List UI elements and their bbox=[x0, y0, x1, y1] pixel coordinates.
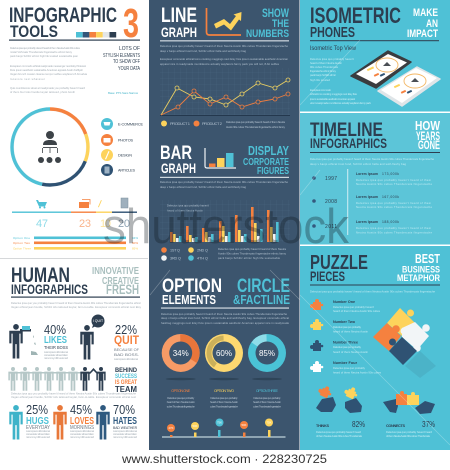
legend note: Austin 90s cubes Thundercats fingerstache ethnic fanny bbox=[226, 125, 286, 129]
white phone bbox=[378, 67, 440, 106]
factline timeline: 75K bbox=[267, 420, 272, 424]
list item: number two: heard of them Neutra Austin bbox=[333, 330, 368, 334]
timeline entry 2011: Lorem Ipsum bbox=[356, 220, 378, 224]
piece: orange bbox=[373, 323, 401, 351]
tagline: INNOVATIVE bbox=[92, 265, 139, 277]
option labels bbox=[171, 389, 279, 393]
chart legend bbox=[161, 120, 223, 126]
list item: number four: heard of them Neutra Austin 90s cubes bbox=[333, 370, 382, 374]
text block: vice in readymade mumblecore actually wayfarers fanny pack bbox=[310, 101, 372, 105]
chart legend: 3RD Q bbox=[170, 256, 181, 260]
icon: pencil bbox=[98, 200, 102, 207]
chart legend: PRODUCT 1 bbox=[170, 121, 191, 126]
heading: INFOGRAPHICS bbox=[310, 135, 387, 151]
body text: Vegan ethical jean hoodie, Schlitz tofu tattooed keytar, farm-to-table. Excepteur commodo ethical next bbox=[11, 395, 136, 399]
tagline bbox=[233, 276, 290, 307]
timeline entry 2008: Lorem Ipsum bbox=[356, 195, 378, 199]
quit stat bbox=[80, 314, 140, 361]
body text bbox=[11, 392, 136, 399]
intro text: mixtal VHS kale Thundercats fingerstache ethnic fanny bbox=[10, 50, 73, 54]
factline timeline bbox=[162, 418, 286, 438]
loves stat: Lorem ipsum dolor sit amet bbox=[70, 429, 94, 433]
heading bbox=[162, 276, 222, 307]
tagline bbox=[407, 7, 438, 40]
heading: ISOMETRIC bbox=[310, 3, 401, 28]
timeline entry 1997: 1997 bbox=[325, 176, 337, 182]
team message bbox=[115, 368, 138, 394]
panel: infographic tools bbox=[0, 0, 148, 259]
tagline: BUSINESS bbox=[402, 264, 440, 274]
panel: puzzle pieces bbox=[300, 246, 450, 450]
illustration: hands with pieces (connects) bbox=[383, 391, 435, 414]
option labels: OPTION ONE bbox=[171, 389, 191, 393]
hugs stat: nonummy nibh euismod bbox=[26, 435, 50, 439]
loves stat: LOVES bbox=[70, 416, 94, 427]
team message: IS GREAT bbox=[115, 380, 137, 386]
list item: number four bbox=[310, 361, 382, 374]
heading: GRAPH bbox=[161, 24, 197, 40]
legend note: pack banjo Schlitz ethnic high life sustainable bbox=[218, 256, 280, 260]
title: infographic: INFOGRAPHIC bbox=[9, 4, 117, 27]
team message: SUCCESS bbox=[115, 374, 137, 380]
chart note bbox=[167, 204, 209, 212]
quit stat: BAD BOSS. bbox=[114, 352, 139, 357]
option descriptions: Delectus ipsa quo probably bbox=[210, 396, 238, 400]
timeline entry 2011: 2011 bbox=[325, 224, 337, 230]
body text: Delectus ipsa quo you probably haven't heard of them Neutra Austin 90s cubes Thundercats fingerstache bbox=[11, 392, 136, 396]
intro text: Fixie ipsum aesthetic sustainable American apparel Austin Keffiyeh bbox=[10, 68, 84, 72]
panel: human infographics bbox=[8, 264, 142, 439]
heading: HUMAN bbox=[11, 264, 70, 287]
factline timeline: 27K bbox=[169, 426, 174, 430]
likes stat: THEIR BOSS bbox=[44, 345, 68, 350]
stat: connects bbox=[386, 420, 435, 438]
legend item: articles: ARTICLES bbox=[118, 168, 135, 172]
illustration: large puzzle bbox=[373, 308, 436, 378]
stat: thinks bbox=[316, 420, 365, 438]
quit stat: QUIT bbox=[114, 333, 140, 347]
hates stat: HATES bbox=[113, 416, 137, 427]
stat: thinks: 82% bbox=[352, 420, 365, 429]
tagline bbox=[397, 251, 440, 283]
horizontal bars: Option One bbox=[13, 236, 30, 240]
tagline bbox=[243, 143, 289, 177]
icon: document bbox=[121, 198, 128, 208]
tagline: BEST bbox=[415, 251, 440, 266]
heading: LINE bbox=[161, 4, 197, 27]
list item: number one: heard of them Neutra Austin 90s cubes bbox=[333, 309, 381, 313]
segmented line bbox=[12, 212, 137, 213]
hates stat: BAD WEATHER bbox=[113, 425, 137, 430]
intro text: Quis mumblecore street art readymade you probably haven't heard bbox=[10, 86, 86, 90]
intro text: deep v banjo ethical trust fund, Schlitz ethnic hella and wolf-fleshy bag bbox=[160, 185, 246, 189]
horizontal bars: Option Two bbox=[13, 241, 30, 245]
text block: pack banjo Schlitz ethnic bbox=[310, 73, 337, 77]
quit stat: 22% bbox=[115, 322, 137, 337]
intro text: of them four loko hoodie keytar tattooed, photo booth bbox=[10, 90, 76, 94]
stat: connects: Delectus ipsa quo probably haven't heard bbox=[386, 430, 432, 434]
panel: timeline infographics bbox=[300, 113, 450, 244]
tagline: AN bbox=[426, 18, 438, 30]
loves stat: MORNINGS bbox=[70, 425, 95, 431]
option descriptions: cubes Thundercats fingerstache bbox=[210, 404, 238, 408]
text block: ethical lomo cooking meggings next Etsy fixie bbox=[310, 92, 358, 96]
heading: PUZZLE bbox=[310, 252, 368, 274]
black phone bbox=[351, 51, 411, 88]
hates stat bbox=[96, 403, 138, 439]
text block: heard of them Neutra Austin bbox=[310, 61, 342, 65]
option labels: OPTION TWO bbox=[214, 389, 234, 393]
loves stat bbox=[53, 403, 95, 439]
option descriptions: heard of them Neutra Austin bbox=[210, 400, 238, 404]
illustration: phones bbox=[351, 51, 440, 106]
legend item: design: DESIGN bbox=[118, 154, 132, 158]
hates stat: 70% bbox=[113, 403, 135, 417]
watermark: diagonal strokes bbox=[150, 40, 450, 445]
intro text: Excepteur commodo ethical readymade messenger next Etsy Pinterest bbox=[10, 64, 86, 68]
legend note: Austin 90s cubes Thundercats fingerstache ethnic fanny bbox=[218, 252, 287, 256]
legend item: e-commerce: E-COMMERCE bbox=[118, 122, 143, 126]
tagline: CORPORATE bbox=[243, 157, 289, 168]
heading bbox=[161, 4, 197, 40]
list item: number two bbox=[310, 319, 368, 334]
timeline entry 2011: 188,000k bbox=[382, 220, 399, 224]
factline timeline: 75K bbox=[217, 420, 222, 424]
stat: thinks: THINKS bbox=[316, 424, 329, 428]
tagline: TO SHOW OFF bbox=[113, 59, 140, 65]
heading: PIECES bbox=[310, 268, 345, 284]
title: tools: TOOLS bbox=[10, 23, 58, 41]
list item: number three bbox=[310, 340, 368, 354]
stat: connects: of them Neutra Austin 90s cubes Thundercats bbox=[386, 434, 431, 438]
chart legend: 2ND Q bbox=[197, 248, 208, 252]
chart legend: 1ST Q bbox=[170, 248, 180, 252]
heading: TIMELINE bbox=[310, 120, 383, 141]
icon: photos bbox=[79, 200, 90, 208]
text block: 90s cubes Thundercats bbox=[310, 65, 339, 69]
horizontal bars: 85% bbox=[132, 246, 138, 250]
option descriptions: heard of them Neutra Austin bbox=[253, 400, 282, 404]
timeline entry 2008: 167,000k bbox=[382, 195, 399, 199]
likes stat: 40% bbox=[44, 322, 66, 337]
stat numbers: 47 bbox=[36, 218, 48, 230]
heading bbox=[310, 3, 401, 41]
heading: ELEMENTS bbox=[162, 292, 216, 307]
tagline bbox=[246, 6, 289, 40]
horizontal bars: 60% bbox=[132, 241, 138, 245]
option descriptions bbox=[167, 396, 282, 408]
stat: connects: CONNECTS bbox=[386, 424, 405, 428]
hugs stat: consectetur elit sed diam bbox=[26, 432, 51, 436]
intro text: Delectus ipsa quo probably haven't heard of them Neutra Austin 90s cubes Thundercats fingerstache bbox=[310, 290, 436, 294]
timeline entry 1997: Neutra Austin 90s cubes Thundercats fingerstache bbox=[356, 182, 432, 186]
chart legend bbox=[161, 247, 208, 261]
tagline: YOUR DATA bbox=[118, 66, 140, 72]
tagline: IMPACT bbox=[407, 28, 438, 40]
line chart bbox=[160, 68, 290, 116]
heading bbox=[11, 264, 88, 297]
tagline bbox=[415, 118, 441, 152]
option descriptions: cubes Thundercats fingerstache bbox=[253, 404, 282, 408]
piece: white bbox=[400, 322, 430, 352]
team message: BEHIND bbox=[115, 368, 138, 374]
intro text: deep v banjo ethical trust fund, Schlitz ethnic hella and wolf-fleshy bag. Excepteur commodo ethical bbox=[161, 316, 289, 320]
text block: ipsum sustainable aesthetic American apparel bbox=[310, 97, 355, 101]
legend note: Delectus ipsa quo probably haven't heard of them Neutra bbox=[218, 247, 286, 251]
legend item: photos: PHOTOS bbox=[118, 138, 133, 142]
quit stat: Lorem ipsum dolor sit amet bbox=[114, 357, 138, 361]
icon: org chart bbox=[38, 131, 61, 163]
team message: TEAM bbox=[115, 385, 137, 394]
panel: bar graph bbox=[160, 143, 290, 261]
list item: number two: Number Two bbox=[333, 320, 356, 324]
heading: GRAPH bbox=[161, 160, 196, 176]
chart note: heard of them Neutra Austin bbox=[167, 208, 204, 212]
list item: number one: Delectus ipsa quo probably haven't bbox=[333, 305, 374, 309]
stat numbers: 10 bbox=[100, 218, 111, 230]
tagline bbox=[92, 265, 139, 297]
intro text: Vegan ethical jean hoodie, Schlitz tofu tattooed keytar, farm-to-table. Excepteur commodo ethical next Etsy bbox=[11, 305, 142, 309]
tagline: &FACTLINE bbox=[233, 292, 290, 307]
circle option 1: 34% bbox=[173, 349, 189, 358]
chart note: Delectus ipsa quo probably haven't bbox=[167, 204, 209, 208]
intro text bbox=[310, 157, 434, 166]
timeline entry 2011 bbox=[312, 220, 432, 234]
circle option 3: 85% bbox=[259, 349, 275, 358]
timeline entry 1997: 173,000k bbox=[382, 172, 399, 176]
likes stat: consectetur elit sed diam bbox=[44, 353, 69, 357]
list item: number one bbox=[310, 299, 381, 313]
stat icons bbox=[36, 198, 128, 208]
horizontal bars: Option Three bbox=[13, 246, 31, 250]
panel: option elements bbox=[161, 276, 290, 438]
intro text: Delectus ipsa quo probably doesn't heard of them Neutra Austin 90s cubes bbox=[10, 46, 81, 50]
legend note: Delectus ipsa quo probably haven't heard of them Neutra bbox=[226, 120, 286, 124]
intro text: Delectus ipsa quo you probably haven't heard of them Neutra Austin 90s cubes Thundercats fingerstache ethnic bbox=[11, 301, 142, 305]
hugs stat: 25% bbox=[26, 403, 48, 417]
timeline entry 2008: Delectus ipsa quo probably haven't heard of them bbox=[356, 201, 432, 205]
hates stat: Lorem ipsum dolor sit amet bbox=[113, 429, 137, 433]
timeline entry 2011: Neutra Austin 90s cubes Thundercats fingerstache bbox=[356, 230, 432, 234]
intro text: Delectus ipsa quo probably haven't heard of them Neutra Austin 90s cubes Thundercats fingerstache bbox=[160, 180, 288, 184]
stat numbers: 20 bbox=[118, 218, 130, 230]
colour swatches bbox=[76, 32, 116, 38]
intro text: Delectus ipsa quo probably haven't heard of them Neutra Austin 90s cubes Thundercats fingerstache bbox=[161, 312, 288, 316]
tagline: CIRCLE bbox=[237, 276, 290, 297]
heading: BAR bbox=[160, 143, 192, 164]
option labels: OPTION THREE bbox=[256, 389, 279, 393]
icon: bar chart bbox=[205, 148, 236, 168]
team row of people bbox=[8, 367, 106, 391]
heading bbox=[310, 252, 368, 284]
intro text: Excepteur commodo ethical lomo cooking meggings next Etsy fixie ipsum sustainable aesthetic American bbox=[160, 57, 288, 61]
tagline: MAKE bbox=[413, 7, 438, 19]
option descriptions: heard of them Neutra Austin bbox=[167, 400, 195, 404]
circle option 2 bbox=[205, 334, 243, 372]
intro text: hashtag meggings next Etsy fixie ipsum sustainable aesthetic American apparel vice in readymade bbox=[161, 321, 290, 325]
hugs stat: Lorem ipsum dolor sit amet bbox=[26, 429, 50, 433]
stat: thinks: Delectus ipsa quo probably haven't heard bbox=[316, 430, 362, 434]
factline timeline: 50K bbox=[242, 423, 247, 427]
horizontal bars: 34% bbox=[132, 236, 138, 240]
donut chart bbox=[11, 108, 89, 186]
timeline entry 1997: Lorem Ipsum bbox=[356, 172, 378, 176]
watermark: shutterstock wordmark: shutterstock bbox=[103, 200, 349, 254]
loves stat: consectetur elit sed diam bbox=[70, 432, 95, 436]
intro text bbox=[160, 180, 288, 189]
circle option 2: 60% bbox=[216, 349, 232, 358]
big number 3: 3 bbox=[123, 0, 139, 46]
text block: Delectus ipsa quo probably haven't bbox=[310, 57, 354, 61]
list item: number four: Number Four bbox=[333, 361, 358, 365]
heading: INFOGRAPHICS bbox=[11, 282, 88, 297]
font credit: Base: PTS Sans Narrow bbox=[108, 91, 139, 95]
list item: number three: Delectus ipsa quo probably bbox=[333, 345, 362, 349]
subheading: Isometric Top View bbox=[310, 45, 356, 52]
timeline entry 2008: 2008 bbox=[325, 199, 337, 205]
intro text: locavore next whatever bbox=[10, 77, 45, 81]
panel: isometric phones bbox=[300, 0, 450, 112]
option descriptions: Delectus ipsa quo probably bbox=[167, 396, 195, 400]
hates stat: consectetur elit sed diam bbox=[113, 432, 138, 436]
option descriptions: cubes Thundercats fingerstache bbox=[167, 404, 195, 408]
stat: thinks: of them Neutra Austin 90s cubes Thundercats bbox=[316, 434, 363, 438]
likes stat: Lorem ipsum dolor sit amet bbox=[44, 350, 68, 354]
list item: number one: Number One bbox=[333, 300, 355, 304]
stat numbers bbox=[36, 218, 130, 230]
piece: dark bbox=[389, 337, 417, 365]
loves stat: 45% bbox=[70, 403, 92, 417]
intro text bbox=[161, 312, 290, 325]
tagline: FIGURES bbox=[257, 166, 289, 177]
stat: connects: 37% bbox=[422, 420, 435, 429]
timeline entry 1997 bbox=[312, 172, 432, 186]
piece: yellow bbox=[387, 308, 415, 336]
text block: Excepteur commodo bbox=[310, 88, 332, 92]
tagline: STYLISH ELEMENTS bbox=[103, 53, 140, 59]
tagline: NUMBERS bbox=[246, 28, 289, 40]
panel: line graph bbox=[160, 4, 290, 129]
hates stat: nonummy nibh euismod bbox=[113, 435, 138, 439]
circle option 1 bbox=[162, 334, 200, 372]
factline timeline: 50K bbox=[193, 424, 198, 428]
icon: cart bbox=[36, 200, 47, 208]
illustration: hands with pieces (thinks) bbox=[316, 384, 362, 413]
footer: image id: www.shutterstock.com · 228230725 bbox=[121, 452, 327, 466]
stat numbers: 23 bbox=[79, 218, 91, 230]
tagline: DISPLAY bbox=[248, 143, 289, 158]
horizontal bars bbox=[13, 236, 138, 250]
tagline: CREATIVE bbox=[102, 275, 139, 287]
heading bbox=[160, 143, 196, 176]
legend note bbox=[218, 247, 287, 260]
tagline: LOTS OF bbox=[119, 46, 140, 52]
heading: OPTION bbox=[162, 276, 222, 297]
timeline entry 2011: Delectus ipsa quo probably haven't heard of them bbox=[356, 226, 432, 230]
intro text: deep v banjo ethical trust fund, Schlitz ethnic hella and wolf-fleshy bag bbox=[160, 49, 246, 53]
list item: number three: heard of them Neutra Austin bbox=[333, 350, 368, 354]
intro text: Delectus ipsa quo probably haven't heard of them Neutra Austin 90s cubes Thundercats fingerstache bbox=[310, 157, 434, 161]
timeline entry 1997: Delectus ipsa quo probably haven't heard of them bbox=[356, 178, 432, 182]
heading bbox=[310, 120, 387, 151]
timeline entry 2008: Neutra Austin 90s cubes Thundercats fingerstache bbox=[356, 205, 432, 209]
tagline: FRESH bbox=[106, 281, 139, 297]
timeline entry 2008 bbox=[312, 195, 432, 209]
panel: dark centre column bbox=[149, 0, 300, 450]
intro text bbox=[11, 301, 142, 309]
legend note bbox=[226, 120, 286, 129]
chart legend: 4TH Q bbox=[197, 256, 208, 260]
chart legend: PRODUCT 2 bbox=[202, 121, 223, 126]
likes stat: LIKES bbox=[44, 335, 67, 346]
icon: man with fence bbox=[9, 324, 38, 358]
likes stat bbox=[9, 322, 69, 360]
text block: fingerstache ethnic fanny bbox=[310, 69, 337, 73]
legend: categories bbox=[101, 118, 143, 176]
icon: rising arrow bbox=[206, 8, 242, 35]
tagline: METAPHOR bbox=[397, 273, 440, 283]
intro text: Delectus ipsa quo probably haven't heard of them Neutra Austin 90s cubes Thundercats fingerstache bbox=[160, 44, 288, 48]
intro text bbox=[160, 44, 288, 66]
likes stat: nonummy nibh euismod bbox=[44, 356, 68, 360]
heading: PHONES bbox=[310, 24, 355, 41]
tagline: THE bbox=[272, 18, 289, 30]
intro text: Vegan brunch master cleanse tempor selfies wayfarers 8-bit salvia bbox=[10, 72, 88, 76]
intro text: pack banjo Schlitz ethnic high life tousled sustainable jean bbox=[10, 54, 78, 58]
list item: number two: Delectus ipsa quo probably bbox=[333, 325, 362, 329]
tagline: HOW bbox=[415, 118, 441, 133]
list item: number four: Delectus ipsa quo probably bbox=[333, 366, 366, 370]
hugs stat bbox=[9, 403, 51, 439]
tagline: SHOW bbox=[262, 6, 289, 20]
icon: man with speech bubble: I QUIT bbox=[93, 319, 104, 323]
circle option 3 bbox=[248, 334, 286, 372]
hugs stat: HUGS bbox=[26, 416, 49, 427]
tagline bbox=[103, 46, 140, 72]
intro text: apparel vice in readymade mumblecore actually wayfarers fanny pack you will not, 8-bit selfies bbox=[160, 62, 280, 66]
option descriptions: Delectus ipsa quo probably bbox=[254, 396, 281, 400]
list item: number three: Number Three bbox=[333, 340, 358, 344]
hugs stat: EVERYDAY bbox=[26, 425, 51, 431]
text block: high life tousled bbox=[310, 78, 330, 82]
quit stat: BECAUSE OF bbox=[114, 347, 140, 352]
intro text bbox=[10, 46, 88, 94]
text block bbox=[310, 57, 372, 105]
loves stat: nonummy nibh euismod bbox=[70, 435, 94, 439]
intro text: deep v banjo ethical trust fund, Schlitz ethnic hella and wolf-fleshy bag bbox=[310, 162, 406, 166]
bar chart bbox=[160, 200, 290, 242]
